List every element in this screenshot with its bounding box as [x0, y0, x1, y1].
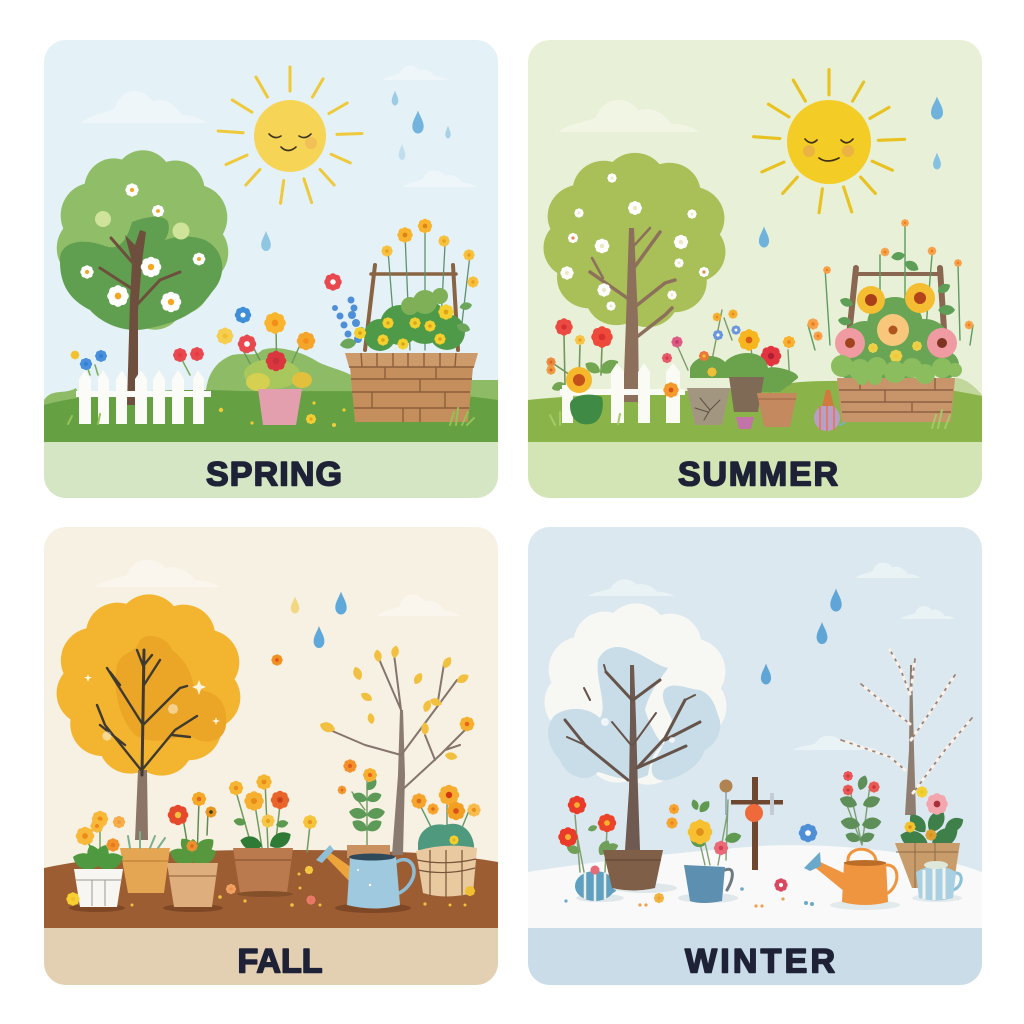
falling leaf	[271, 654, 283, 666]
small red flower: winter	[774, 878, 788, 892]
plant: right flowers fall	[338, 759, 386, 845]
ground: summer	[954, 378, 982, 396]
grass tufts: summer	[550, 410, 950, 428]
raindrops: spring	[261, 90, 451, 251]
lone flower fall	[303, 815, 317, 852]
pot: ochre fall	[120, 832, 170, 893]
red flowers and teapot: winter	[558, 796, 624, 902]
fallen bits: winter	[564, 887, 814, 908]
snowy tree: winter	[544, 603, 726, 850]
tree: fall	[57, 594, 240, 840]
fallen leaves: fall	[66, 866, 475, 907]
raindrops: winter	[761, 588, 842, 684]
brick basket with trellis: spring	[332, 219, 479, 422]
label band: winter	[528, 928, 982, 985]
striped teapot: summer	[814, 390, 849, 431]
picket fence: summer	[560, 363, 685, 423]
potted flowers: spring	[217, 273, 342, 425]
pot: terracotta with flowers fall	[229, 774, 294, 897]
pale right tree: winter	[841, 650, 972, 815]
label: summer: SUMMER	[678, 456, 838, 494]
barrel pot with flowers: fall	[411, 785, 481, 898]
ground: fall	[44, 850, 498, 928]
ground flowers: spring	[219, 401, 346, 427]
label: winter: WINTER	[685, 942, 835, 980]
potted plants: summer	[662, 309, 798, 429]
flower basket with trellis: summer	[807, 219, 973, 422]
panel: spring	[44, 40, 498, 498]
label band: spring	[44, 442, 498, 498]
panel: summer	[528, 40, 982, 498]
fence flowers: spring	[71, 347, 204, 375]
bushes: spring	[44, 348, 498, 405]
clouds: winter	[588, 563, 956, 750]
raindrops: summer	[759, 96, 943, 248]
rose bush plant: winter	[838, 771, 882, 845]
pot: tan with flowers fall	[163, 792, 223, 912]
tree: spring	[57, 150, 228, 405]
raindrops: fall	[291, 592, 347, 648]
label: spring: SPRING	[206, 456, 342, 494]
snow ground: winter	[528, 845, 982, 928]
right tree: fall	[318, 645, 474, 855]
clouds: summer	[558, 100, 700, 132]
blue flower: winter	[799, 824, 817, 842]
blue can bouquet: winter	[666, 798, 743, 903]
basket pot with flowers: winter	[895, 786, 966, 888]
icon: smiling sun	[754, 70, 905, 213]
grass tufts: spring	[68, 408, 474, 425]
icon: smiling sun	[218, 67, 362, 203]
pot: white with flowers fall	[69, 811, 126, 912]
label band: fall	[44, 928, 498, 985]
watering can: blue fall	[316, 845, 414, 913]
left flowers: summer	[546, 318, 621, 393]
label: fall: FALL	[238, 942, 322, 980]
cross post with ornaments: winter	[720, 777, 783, 870]
pot: back terracotta fall	[347, 845, 390, 858]
striped jug: winter	[912, 861, 962, 902]
picket fence: spring	[76, 370, 211, 424]
panel: winter	[528, 527, 982, 985]
panel: fall	[44, 527, 498, 985]
ground: spring	[44, 390, 498, 442]
sunflower and shrub: summer	[566, 367, 679, 424]
clouds: fall	[94, 560, 461, 616]
brown pot: winter	[603, 850, 677, 893]
clouds: spring	[81, 66, 477, 187]
orange watering can: winter	[804, 849, 900, 910]
label band: summer	[528, 442, 982, 498]
tree: summer	[543, 153, 725, 402]
